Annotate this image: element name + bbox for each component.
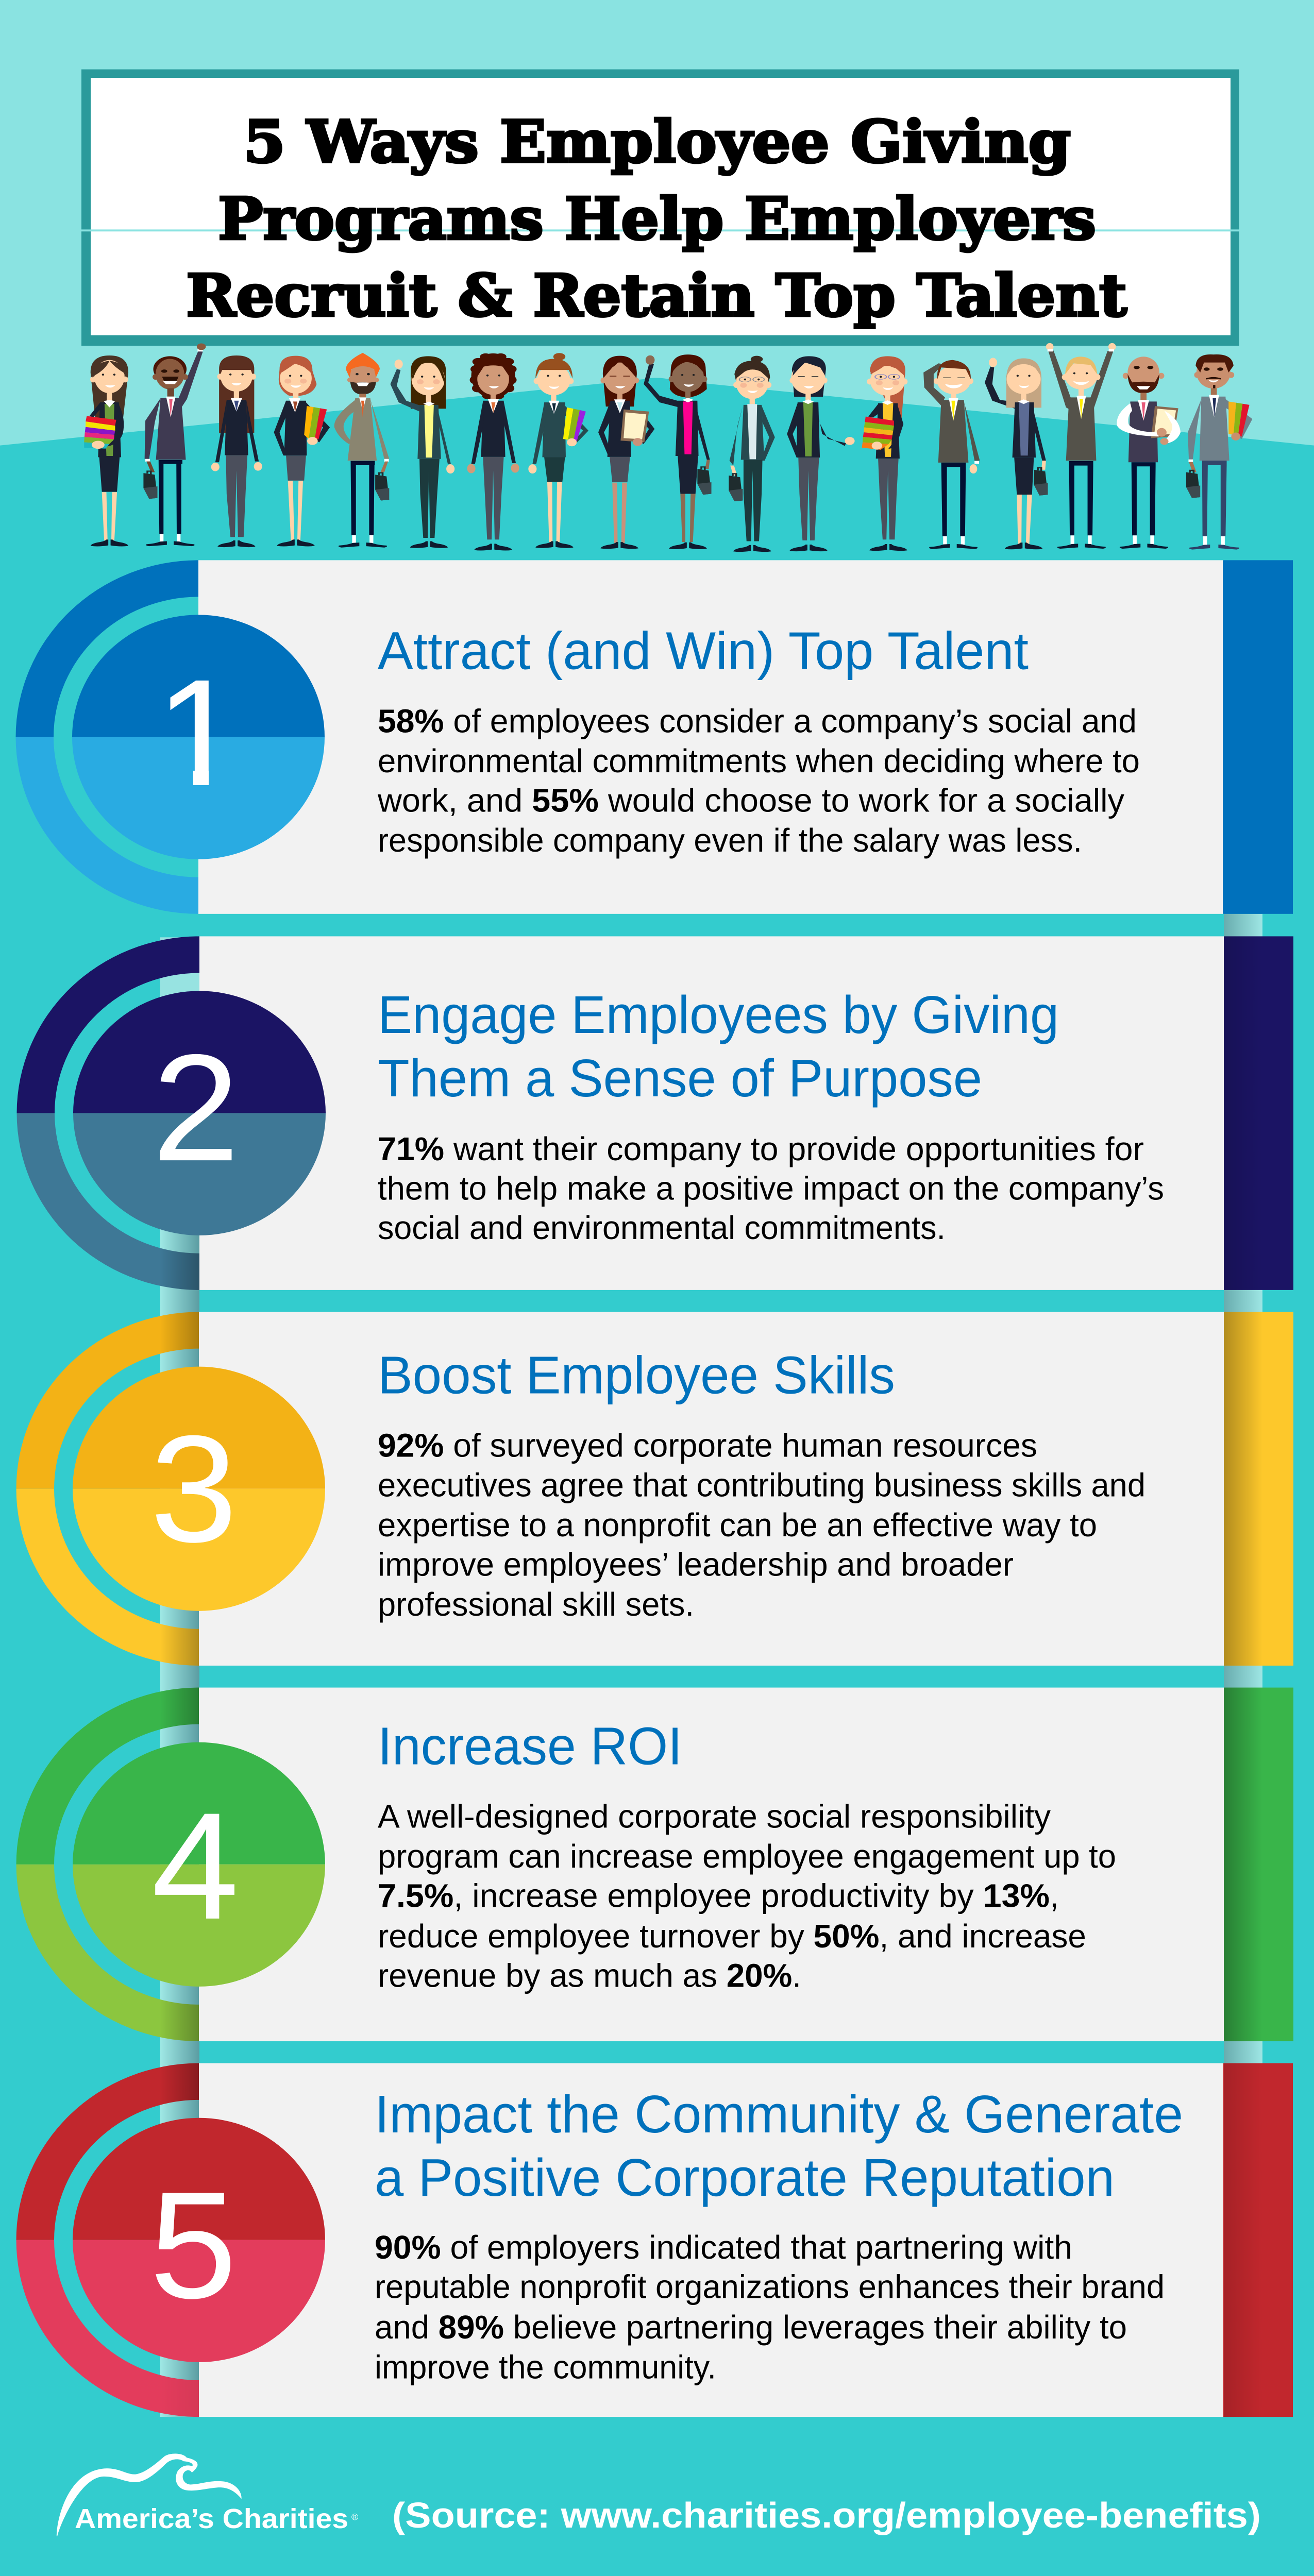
panel 5: impact the community [16,2063,1293,2417]
ring 4 [16,1688,199,2041]
panel 1: attract top talent [15,560,1293,914]
logo wordmark: America’s Charities [75,2503,348,2534]
heading 2: Them a Sense of Purpose [378,1049,982,1108]
body 4: revenue by as much as 20%. [378,1957,801,1994]
body 5: 90% of employers indicated that partnering with [375,2229,1072,2266]
heading 2: Engage Employees by Giving [378,986,1059,1045]
title: Recruit & Retain Top Talent [186,262,1127,329]
person 4: red haired woman with books [274,356,330,546]
circle 5 [73,2118,325,2362]
title: Programs Help Employers [218,185,1096,252]
body 2 [378,1130,1164,1246]
circle 4 [73,1742,325,1987]
panel 3: boost employee skills [16,1312,1293,1666]
person 11: woman with glasses and bun [729,356,775,552]
body 5: and 89% believe partnering leverages their ability to [375,2309,1127,2346]
body 4 [378,1798,1116,1994]
body 3: improve employees’ leadership and broader [378,1546,1014,1583]
heading 3: Boost Employee Skills [378,1346,895,1405]
person 7: woman with curly hair [467,353,519,551]
person 16: man with both arms raised [1046,343,1116,549]
body 3: 92% of surveyed corporate human resources [378,1427,1037,1464]
circle 3 [73,1367,325,1611]
body 4: reduce employee turnover by 50%, and increase [378,1918,1086,1955]
person 12: woman with black bob [787,356,855,551]
ring 2 [16,936,199,1290]
body 5: improve the community. [375,2349,716,2385]
title [186,108,1127,329]
body 3: executives agree that contributing business skills and [378,1467,1145,1503]
body 1: responsible company even if the salary was less. [378,822,1082,859]
source line: (Source: www.charities.org/employee-benefits) [392,2496,1261,2536]
person 9: woman with clipboard [598,356,654,549]
person 15: waving woman with blond hair [985,358,1048,549]
body 2: social and environmental commitments. [378,1209,946,1246]
number 1 [170,680,209,785]
body 5: reputable nonprofit organizations enhances their brand [375,2268,1165,2305]
number 1: 1 [155,647,243,818]
body 1: environmental commitments when deciding where to [378,742,1140,779]
person 17: bald bearded man with clipboard [1117,357,1181,549]
heading 2 [378,986,1059,1108]
title: 5 Ways Employee Giving [243,108,1071,176]
heading 4: Increase ROI [378,1717,682,1776]
title banner [81,70,1239,346]
circle 2 [73,991,326,1235]
person 2: man raising arm [143,343,206,546]
panel 2: engage employees [16,936,1293,1290]
body 4: program can increase employee engagement up to [378,1838,1116,1875]
body 3: professional skill sets. [378,1586,694,1623]
icon: eagle [57,2453,242,2536]
person 1: woman with books [84,355,128,546]
person 13: red haired woman with glasses and books [862,356,907,551]
body 2: them to help make a positive impact on the company’s [378,1170,1164,1207]
logo: America's Charities [57,2453,358,2536]
circle 1 [72,615,325,859]
number 5: 5 [149,2160,237,2330]
ring 1 [15,560,198,914]
number 4: 4 [151,1781,239,1951]
body 1 [377,702,1140,859]
registered mark: ® [351,2512,358,2522]
body 3: expertise to a nonprofit can be an effective way to [378,1506,1097,1544]
body 2: 71% want their company to provide opportunities for [378,1130,1144,1167]
ring 5 [16,2063,199,2417]
body 4: 7.5%, increase employee productivity by 13%, [378,1877,1059,1914]
person 6: waving woman [391,356,454,548]
number 2: 2 [152,1023,240,1193]
person 8: woman with bun and books [528,353,588,548]
person 3: woman with long brown hair [211,355,262,547]
heading 5: Impact the Community & Generate [375,2086,1183,2144]
body 1: work, and 55% would choose to work for a socially [377,782,1125,819]
heading 5: a Positive Corporate Reputation [375,2149,1115,2208]
person 14: man with hand on head [923,360,980,549]
number 3: 3 [150,1403,238,1574]
body 3 [378,1427,1145,1623]
group of employees right [644,343,1252,552]
left vertical connector [160,937,199,2417]
right vertical connector [1224,914,1262,2411]
heading 5 [375,2086,1183,2208]
body 5 [375,2229,1165,2385]
panel 4: increase ROI [16,1688,1293,2041]
body 4: A well-designed corporate social responsibility [378,1798,1051,1835]
group of employees left [84,343,654,551]
person 18: man with mustache and books [1186,354,1252,550]
person 5: man in turban with briefcase [334,353,389,548]
heading 1: Attract (and Win) Top Talent [378,622,1029,681]
body 1: 58% of employees consider a company’s social and [378,702,1137,739]
person 10: waving woman with pink top [644,354,712,549]
ring 3 [16,1312,199,1666]
